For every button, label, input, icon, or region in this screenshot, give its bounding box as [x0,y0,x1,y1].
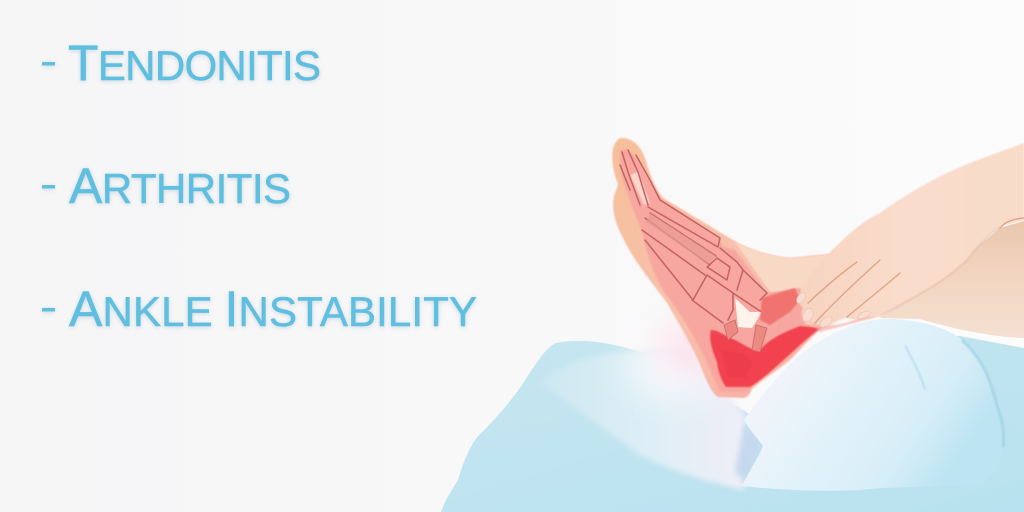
pillow crease [905,345,925,390]
finger creases [808,218,1024,323]
fingernails [795,291,872,329]
foot with skeleton overlay [612,138,832,398]
pink skeleton area [620,149,820,392]
list item: arthritis: ARTHRITIS [69,158,291,214]
pillow right edge shadow [962,340,1004,447]
forearm and hand [795,143,1024,332]
list item: tendonitis: TENDONITIS [68,35,321,91]
list of ankle conditions [42,35,477,337]
heel inflammation [710,326,820,387]
skeleton bone outlines [620,150,767,323]
foot shape [612,138,830,398]
list item: ankle instability: ANKLE INSTABILITY [69,281,477,337]
fingertip redness [805,316,880,332]
thigh [880,221,1024,338]
pain glow [630,328,722,393]
blanket [441,336,1024,512]
pillow [742,319,1004,491]
heel darker tissue [722,350,752,378]
pale joint gap [735,298,762,328]
joint bones over heel [724,320,767,352]
forearm [798,143,1024,328]
wrist-to-leg shadow [880,226,1003,316]
metatarsal shading [646,213,716,264]
toe highlights [630,172,650,205]
ankle skin [735,242,832,300]
ankle red tendon patch [760,288,800,325]
